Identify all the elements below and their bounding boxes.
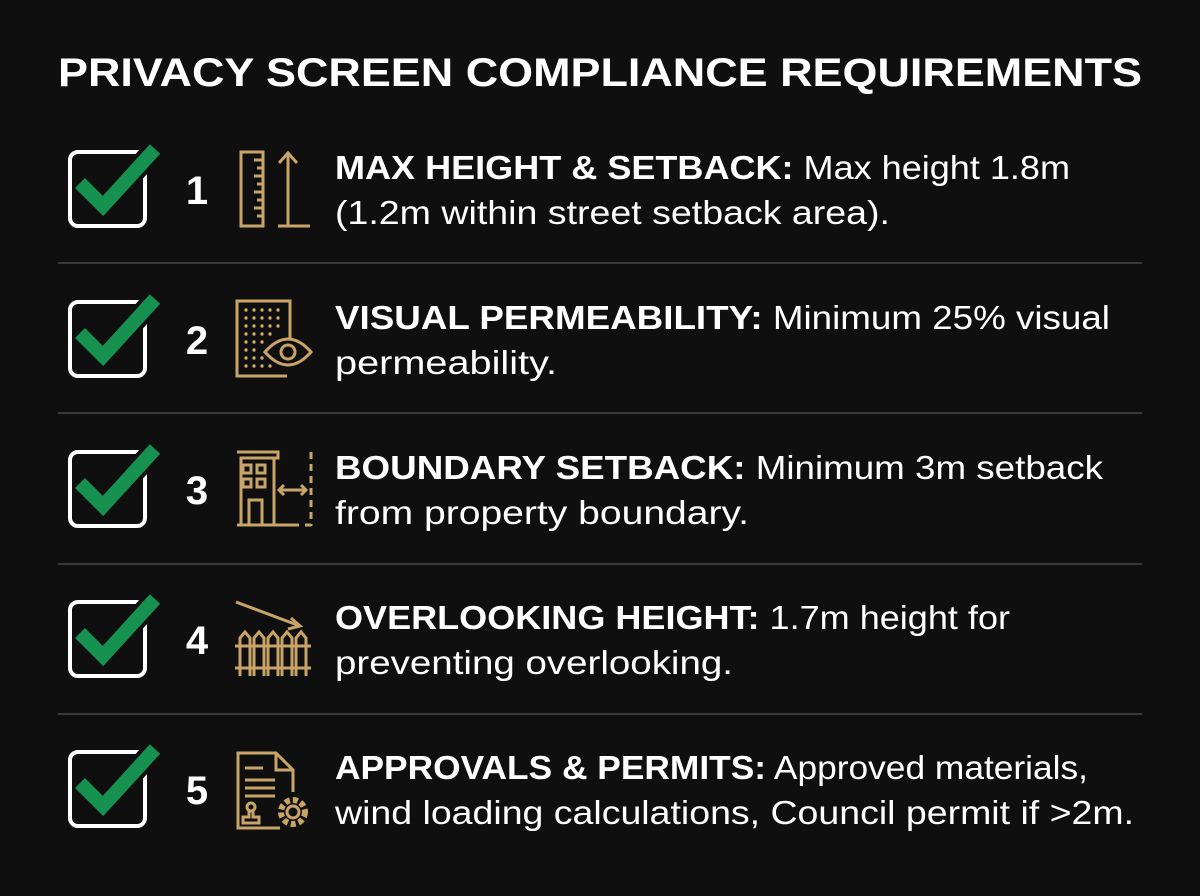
text 5: APPROVALS & PERMITS: Approved materials, xyxy=(335,749,1088,786)
number 2: 2 xyxy=(186,319,208,363)
text 1: MAX HEIGHT & SETBACK: Max height 1.8m xyxy=(335,149,1070,186)
text 4: OVERLOOKING HEIGHT: 1.7m height for xyxy=(335,599,1010,636)
checkbox 4 xyxy=(70,599,155,676)
checkbox 5 xyxy=(70,749,155,826)
number 4: 4 xyxy=(186,619,209,663)
row 2: permeability. xyxy=(335,344,557,381)
row 3 xyxy=(70,449,1104,531)
checkbox 3 xyxy=(70,449,155,526)
icon: building with setback xyxy=(237,452,311,526)
row 1 xyxy=(70,149,1070,231)
icon: document with stamp and gear xyxy=(238,753,305,828)
checkbox 1 xyxy=(70,149,155,226)
row 4: preventing overlooking. xyxy=(335,644,733,681)
row 4 xyxy=(70,599,1010,681)
row 3: from property boundary. xyxy=(335,494,749,531)
number 5: 5 xyxy=(186,769,208,813)
row 5: wind loading calculations, Council permit if >2m. xyxy=(334,794,1134,831)
row 5 xyxy=(70,749,1134,831)
row 1: (1.2m within street setback area). xyxy=(335,194,890,231)
number 1: 1 xyxy=(186,169,208,213)
icon: ruler arrow xyxy=(241,152,310,226)
icon: perforated panel with eye xyxy=(237,301,311,376)
number 3: 3 xyxy=(186,469,208,513)
icon: fence with overlooking arrow xyxy=(235,602,311,676)
row 2 xyxy=(70,299,1110,381)
title: PRIVACY SCREEN COMPLIANCE REQUIREMENTS xyxy=(58,51,1142,95)
text 3: BOUNDARY SETBACK: Minimum 3m setback xyxy=(335,449,1104,486)
text 2: VISUAL PERMEABILITY: Minimum 25% visual xyxy=(335,299,1110,336)
checkbox 2 xyxy=(70,299,155,376)
